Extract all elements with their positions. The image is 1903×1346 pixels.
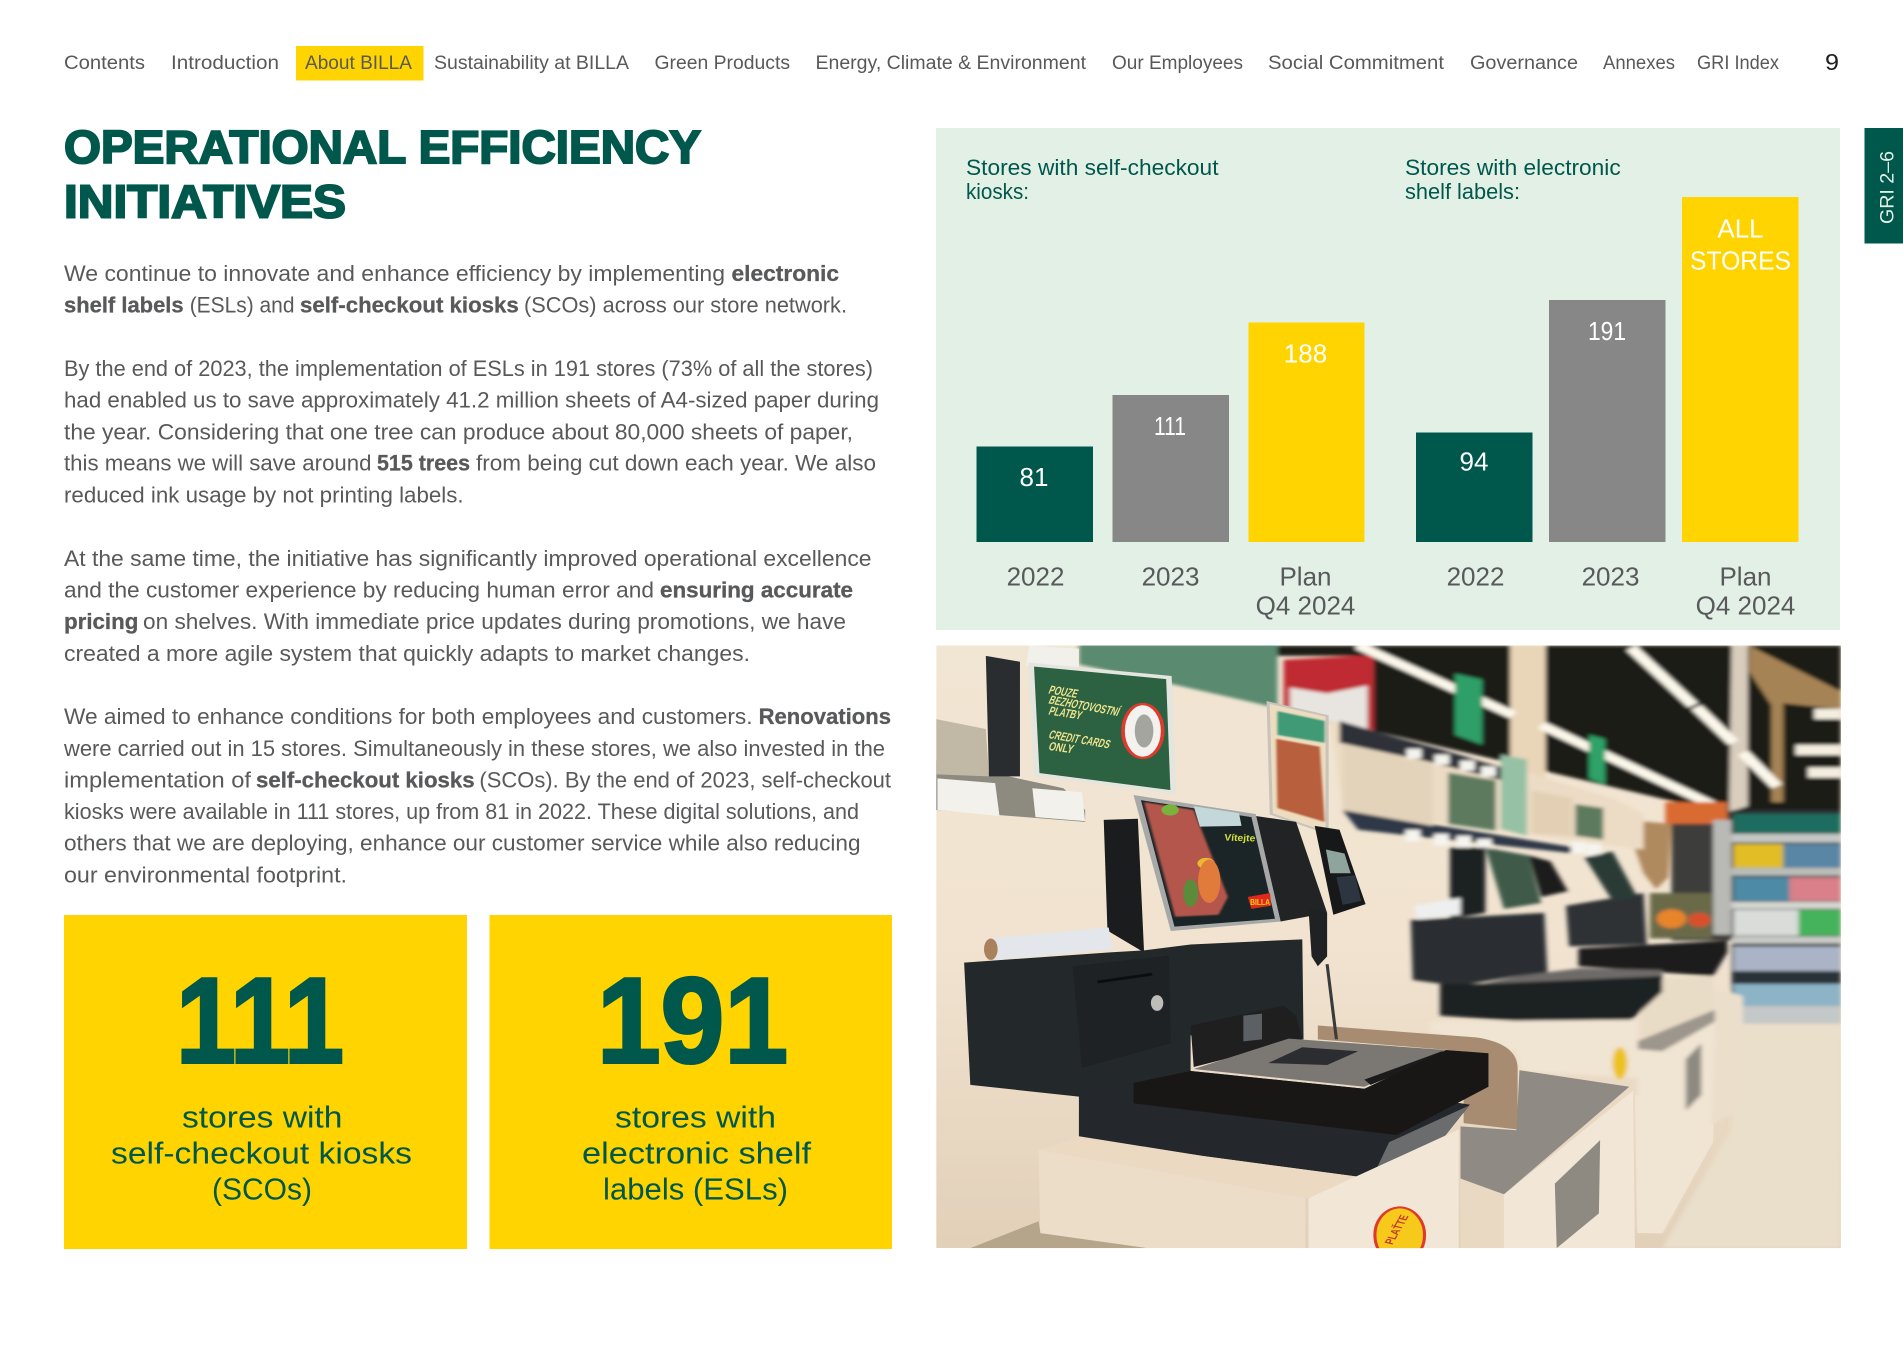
axis labels: Q4 2024 xyxy=(1696,590,1795,620)
paragraph: renovations: implementation of xyxy=(64,767,252,792)
bar plan: STORES xyxy=(1690,246,1791,276)
axis labels xyxy=(1007,562,1355,620)
title: INITIATIVES xyxy=(64,176,346,228)
bar plan: 188 xyxy=(1284,338,1327,368)
kiosk 2 xyxy=(1450,848,1485,919)
paragraph: operational excellence: At the same time, the initiative has significantly improved operational excellence xyxy=(64,546,872,571)
paragraph: intro xyxy=(64,261,847,318)
paragraph: ESL savings: 515 trees xyxy=(377,451,470,476)
paragraph: operational excellence: on shelves. With immediate price updates during promotions, we have xyxy=(143,609,846,634)
big number 191: 191 xyxy=(597,953,788,1089)
payment sign: POUZE xyxy=(1047,684,1080,701)
paragraph: operational excellence: ensuring accurate xyxy=(660,578,853,602)
navigation bar xyxy=(64,46,1779,80)
yellow floor sticker: PLAŤTE xyxy=(1381,1213,1412,1246)
floor xyxy=(1662,1024,1841,1248)
paragraph: operational excellence: and the customer experience by reducing human error and xyxy=(64,578,654,602)
payment sign xyxy=(1031,665,1173,792)
counter 4 xyxy=(1713,988,1743,1124)
navigation bar: Energy, Climate & Environment xyxy=(816,53,1087,74)
paragraph: intro: (SCOs) across our store network. xyxy=(524,293,847,318)
paragraph: ESL savings: this means we will save around xyxy=(64,451,372,476)
navigation bar: About BILLA xyxy=(305,53,412,74)
left shelf and labels xyxy=(936,761,1085,822)
paragraph: intro: shelf labels xyxy=(64,293,184,318)
bag roll xyxy=(984,927,1112,960)
stat description xyxy=(582,1100,811,1206)
navigation bar: GRI Index xyxy=(1697,53,1779,74)
scanner tray xyxy=(1194,1039,1446,1087)
bar plan xyxy=(1682,197,1798,542)
store shelves xyxy=(1671,814,1734,941)
axis labels: Q4 2024 xyxy=(1256,590,1355,620)
kiosk 3 xyxy=(1566,893,1647,946)
title xyxy=(64,121,701,228)
bar plan xyxy=(1248,322,1364,542)
paragraph: renovations xyxy=(63,704,891,887)
paragraph: ESL savings xyxy=(64,356,879,507)
yellow floor sticker xyxy=(1373,1206,1426,1248)
stat description: stores with xyxy=(615,1100,776,1135)
counter 2 xyxy=(1430,1020,1639,1078)
side tab: GRI 2-6 xyxy=(1864,128,1903,244)
axis labels: Plan xyxy=(1719,562,1772,592)
distant shelving with labels xyxy=(1330,721,1644,850)
axis labels: 2023 xyxy=(1582,562,1639,592)
axis labels: 2022 xyxy=(1007,562,1064,592)
navigation bar: Contents xyxy=(64,53,145,74)
stat description: electronic shelf xyxy=(582,1136,811,1171)
payment sign: CREDIT CARDS xyxy=(1047,729,1112,751)
stat card: 191 electronic shelf label stores xyxy=(490,915,892,1249)
paragraph: ESL savings: reduced ink usage by not printing labels. xyxy=(64,482,464,507)
paragraph: intro: We continue to innovate and enhance efficiency by implementing xyxy=(64,261,725,286)
chart title: shelf labels: xyxy=(1405,179,1520,204)
printer and card reader xyxy=(1256,816,1366,1039)
touch screen xyxy=(1134,795,1281,931)
bar 2022: 94 xyxy=(1460,447,1488,477)
stat card: 111 self-checkout stores xyxy=(64,915,467,1249)
axis labels: 2022 xyxy=(1447,562,1504,592)
flowers xyxy=(1625,820,1671,889)
bar 2023: 111 xyxy=(1154,411,1186,441)
paragraph: operational excellence xyxy=(64,546,872,666)
side tab: GRI 2-6: GRI 2–6 xyxy=(1878,151,1898,224)
panel: store charts xyxy=(936,128,1840,630)
paragraph: renovations: our environmental footprint. xyxy=(64,862,347,887)
active nav highlight xyxy=(296,46,424,80)
chart title xyxy=(1405,155,1621,204)
paragraph: renovations: kiosks were available in 111 stores, up from 81 in 2022. These digital solutions, and xyxy=(64,799,859,824)
navigation bar: Social Commitment xyxy=(1268,53,1445,74)
paragraph: ESL savings: By the end of 2023, the implementation of ESLs in 191 stores (73% of all the stores) xyxy=(64,356,873,381)
bar 2023 xyxy=(1549,300,1666,542)
navigation bar: Introduction xyxy=(171,53,279,74)
axis labels: Plan xyxy=(1279,562,1332,592)
big number 111: 111 xyxy=(176,953,344,1089)
navigation bar: Green Products xyxy=(654,53,790,74)
brown partition xyxy=(1318,1026,1518,1130)
payment sign: PLATBY xyxy=(1047,705,1084,723)
bar 2022 xyxy=(1416,432,1532,542)
bar plan: ALL xyxy=(1717,214,1764,244)
chart title: Stores with self-checkout xyxy=(966,155,1218,180)
paragraph: intro: electronic xyxy=(732,261,839,286)
paragraph: operational excellence: created a more agile system that quickly adapts to market changes. xyxy=(64,641,750,666)
bar 2023: 191 xyxy=(1588,316,1626,346)
paragraph: renovations: Renovations xyxy=(759,704,891,729)
bar 2023 xyxy=(1112,395,1229,542)
paragraph: intro: (ESLs) and xyxy=(190,293,294,318)
blurred store background xyxy=(1079,644,1841,1248)
navigation bar: Annexes xyxy=(1603,53,1675,74)
photo: self-checkout kiosks in a BILLA store xyxy=(936,644,1841,1263)
touch screen: Vítejte xyxy=(1224,832,1256,844)
paragraph: ESL savings: the year. Considering that one tree can produce about 80,000 sheets of paper, xyxy=(64,419,853,444)
kiosk cabinet xyxy=(964,939,1304,1097)
stat description: (SCOs) xyxy=(212,1172,312,1206)
paragraph: renovations: were carried out in 15 stores. Simultaneously in these stores, we also invested in the xyxy=(63,736,885,761)
payment sign: BEZHOTOVOSTNÍ xyxy=(1047,692,1123,719)
wooden counter base xyxy=(970,1130,1459,1248)
stat description: stores with xyxy=(182,1100,342,1135)
navigation bar: Governance xyxy=(1470,53,1578,74)
chart title: Stores with electronic xyxy=(1405,155,1621,180)
black counter top xyxy=(1134,1050,1488,1135)
kiosk main column xyxy=(1104,819,1144,952)
paragraph: renovations: We aimed to enhance conditions for both employees and customers. xyxy=(64,704,752,729)
payment sign: ONLY xyxy=(1047,740,1076,756)
chart title: kiosks: xyxy=(966,179,1029,204)
paragraph: ESL savings: had enabled us to save approximately 41.2 million sheets of A4-sized paper during xyxy=(64,388,879,413)
navigation bar: Our Employees xyxy=(1112,53,1243,74)
title: OPERATIONAL EFFICIENCY xyxy=(64,121,701,173)
bar 2022: 81 xyxy=(1020,462,1048,492)
stat description: self-checkout kiosks xyxy=(111,1136,412,1171)
chart title xyxy=(966,155,1218,204)
steel counter xyxy=(1461,1070,1629,1194)
paragraph: renovations: self-checkout kiosks xyxy=(256,767,475,792)
paragraph: intro: self-checkout kiosks xyxy=(300,293,519,318)
poster xyxy=(1268,702,1327,833)
stat description xyxy=(111,1100,412,1206)
counter 3 xyxy=(1637,1012,1715,1233)
bar 2022 xyxy=(976,446,1093,542)
scanner xyxy=(1191,1006,1302,1067)
touch screen: BILLA xyxy=(1250,898,1270,907)
lower kiosk body xyxy=(1079,1071,1470,1179)
paragraph: renovations: others that we are deploying, enhance our customer service while also reducing xyxy=(64,831,861,856)
axis labels: 2023 xyxy=(1142,562,1199,592)
paragraph: renovations: (SCOs). By the end of 2023, self-checkout xyxy=(479,767,891,792)
navigation bar: Sustainability at BILLA xyxy=(434,53,629,74)
paragraph: ESL savings: from being cut down each year. We also xyxy=(476,451,876,476)
bar chart: self-checkout kiosks xyxy=(966,155,1364,620)
bar chart: electronic shelf labels xyxy=(1405,155,1798,620)
axis labels xyxy=(1447,562,1795,620)
stat description: labels (ESLs) xyxy=(603,1172,788,1206)
page number: 9 xyxy=(1825,49,1839,75)
paragraph: operational excellence: pricing xyxy=(64,609,138,634)
